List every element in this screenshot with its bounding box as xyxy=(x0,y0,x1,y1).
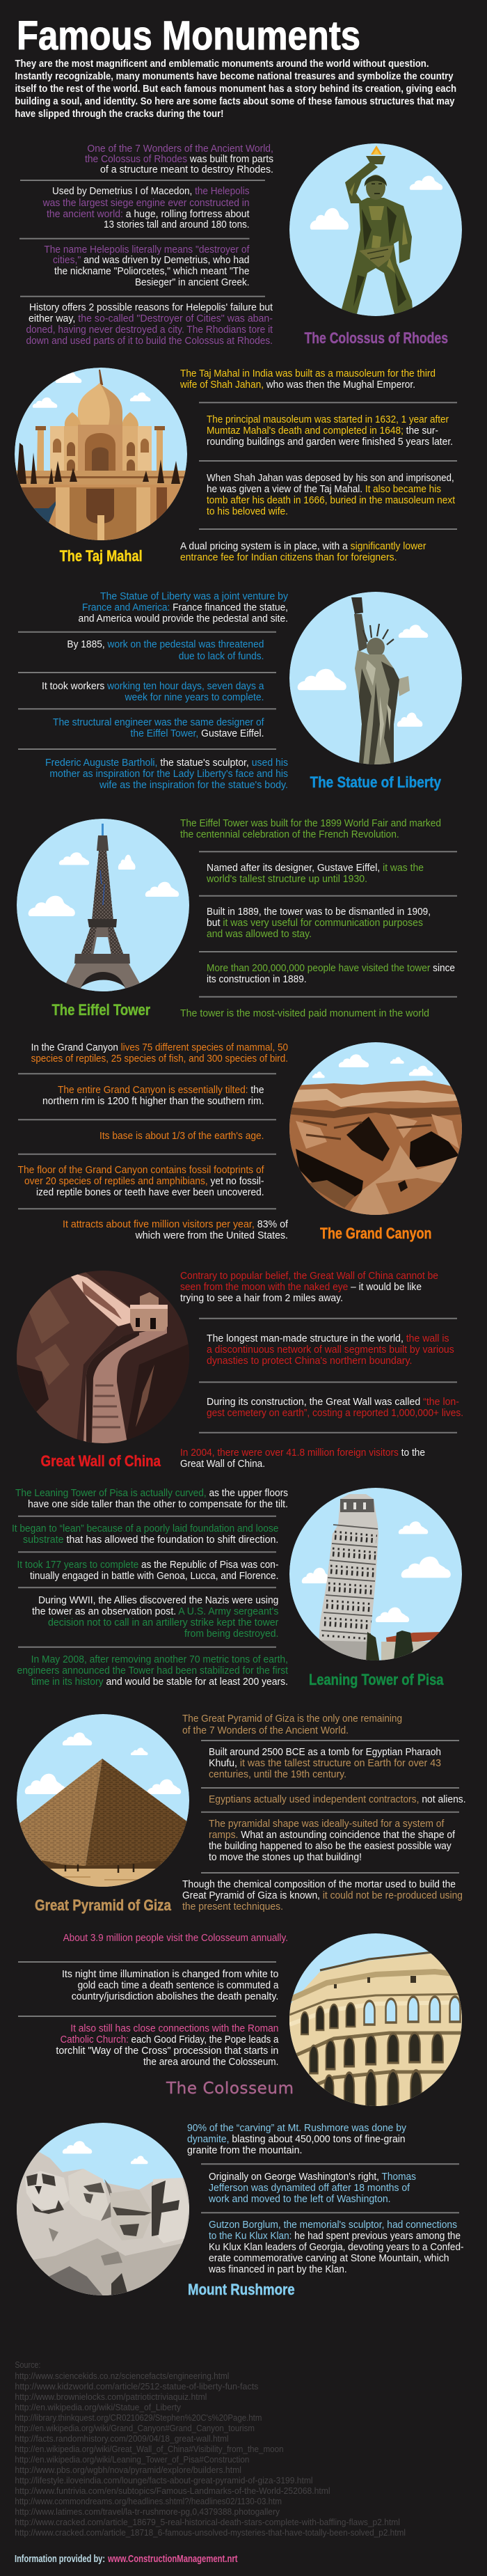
fact 5: Frederic Auguste Bartholi, the statue's sculptor, used his xyxy=(45,757,288,769)
fact 1: The Statue of Liberty was a joint venture by xyxy=(100,590,288,602)
fact 2 xyxy=(209,1746,441,1780)
illustration: Great Wall of China xyxy=(17,1271,189,1443)
heading: Great Wall of China: Great Wall of China xyxy=(40,1452,161,1470)
fact 1: of the 7 Wonders of the Ancient World. xyxy=(182,1725,349,1736)
fact 1: About 3.9 million people visit the Colosseum annually. xyxy=(63,1932,288,1944)
fact 2: By 1885, work on the pedestal was threatened xyxy=(67,638,264,650)
fact 4: its construction in 1889. xyxy=(207,973,307,985)
fact 3: was financed in part by the Klan. xyxy=(208,2263,347,2275)
heading: The Colosseum: The Colosseum xyxy=(166,2080,294,2098)
fact 2: the ancient world: a huge, rolling fortress about xyxy=(47,208,250,220)
fact 5: Though the chemical composition of the mortar used to build the xyxy=(182,1878,456,1890)
source list: http://www.latimes.com/travel/la-tr-rushmore-pg,0,4379388.photogallery xyxy=(15,2506,280,2517)
source list: http://www.sciencekids.co.nz/sciencefacts/engineering.html xyxy=(15,2371,229,2381)
fact 1: have one side taller than the other to compensate for the tilt. xyxy=(28,1498,288,1510)
fact 4 xyxy=(180,1447,425,1470)
heading: The Colossus of Rhodes: The Colossus of Rhodes xyxy=(305,329,448,347)
fact 4: from being destroyed. xyxy=(184,1628,278,1640)
fact 1: The Leaning Tower of Pisa is actually curved, as the upper floors xyxy=(15,1487,288,1499)
source list: http://www.cracked.com/article_18718_6-famous-unsolved-mysteries-that-have-totally-been-solved_p2.html xyxy=(15,2527,406,2538)
fact 4 xyxy=(207,962,455,985)
fact 5 xyxy=(45,757,288,791)
fact 5 xyxy=(182,1878,463,1913)
source list: http://www.funtrivia.com/en/subtopics/Famous-Landmarks-of-the-World-252068.html xyxy=(15,2485,330,2496)
fact 1 xyxy=(78,590,288,625)
fact 3 xyxy=(42,680,264,703)
fact 4: More than 200,000,000 people have visited the tower since xyxy=(207,962,455,974)
fact 2: world's tallest structure up until 1930. xyxy=(206,873,367,885)
fact 1: In the Grand Canyon lives 75 different species of mammal, 50 xyxy=(31,1042,288,1053)
panel: The Grand Canyon xyxy=(18,1042,466,1242)
intro paragraph: have slipped through the cracks during the tour! xyxy=(15,108,224,120)
fact 5: The tower is the most-visited paid monument in the world xyxy=(180,1007,429,1019)
fact 4: the building happened to also be the easiest possible way xyxy=(209,1840,452,1852)
fact 2: rounding buildings and garden were finished 5 years later. xyxy=(207,436,453,448)
fact 4: over 20 species of reptiles and amphibians, yet no fossil- xyxy=(24,1175,264,1187)
source list xyxy=(15,2359,406,2538)
fact 3: When Shah Jahan was deposed by his son and imprisoned, xyxy=(207,472,454,484)
heading: The Taj Mahal: The Taj Mahal xyxy=(60,547,143,565)
fact 4: to move the stones up that building! xyxy=(209,1851,362,1863)
fact 5: wife as the inspiration for the statue's body. xyxy=(99,779,288,791)
fact 3: he was given a view of the Taj Mahal. It also became his xyxy=(207,483,441,495)
fact 3: It also still has close connections with the Roman xyxy=(70,2023,278,2034)
fact 3 xyxy=(207,1396,463,1419)
fact 1: species of reptiles, 25 species of fish, and 300 species of bird. xyxy=(31,1053,288,1065)
source list: http://en.wikipedia.org/wiki/Grand_Canyon#Grand_Canyon_tourism xyxy=(15,2423,255,2433)
heading: The Eiffel Tower: The Eiffel Tower xyxy=(51,1001,150,1019)
fact 5: engineers announced the Tower had been stabilized for the first xyxy=(17,1665,289,1676)
illustration: Taj Mahal with reflecting pool xyxy=(14,368,188,540)
fact 1: and America would provide the pedestal and site. xyxy=(78,613,288,625)
illustration: The Colosseum xyxy=(289,1933,473,2110)
fact 3: Its base is about 1/3 of the earth's age. xyxy=(99,1130,264,1142)
fact 3 xyxy=(207,472,456,517)
fact 2 xyxy=(42,185,250,230)
fact 3: Catholic Church: each Good Friday, the Pope leads a xyxy=(61,2034,279,2045)
fact 2: work and moved to the left of Washington. xyxy=(208,2193,391,2205)
fact 4 xyxy=(180,540,426,563)
source list: http://www.kidzworld.com/article/2512-statue-of-liberty-fun-facts xyxy=(15,2381,259,2392)
fact 1: The Eiffel Tower was built for the 1899 World Fair and marked xyxy=(180,817,441,829)
fact 3: the area around the Colosseum. xyxy=(143,2056,278,2068)
heading: Mount Rushmore: Mount Rushmore xyxy=(188,2281,295,2298)
fact 1: One of the 7 Wonders of the Ancient World, xyxy=(87,143,273,155)
fact 1: The Taj Mahal in India was built as a mausoleum for the third xyxy=(180,368,436,379)
source list: http://library.thinkquest.org/CR0210629/Stephen%20C's%20Page.htm xyxy=(15,2412,262,2423)
fact 1: dynamite, blasting about 450,000 tons of fine-grain xyxy=(187,2133,406,2145)
fact 3: It took workers working ten hour days, seven days a xyxy=(42,680,264,692)
fact 3 xyxy=(208,2219,463,2275)
fact 2 xyxy=(67,638,264,662)
fact 2: a discontinuous network of wall segments built by various xyxy=(207,1344,454,1356)
fact 3: During its construction, the Great Wall was called “the lon- xyxy=(207,1396,459,1408)
fact 2: Used by Demetrius I of Macedon, the Helepolis xyxy=(52,185,250,197)
fact 5: which were from the United States. xyxy=(135,1230,288,1241)
panel: The Colosseum xyxy=(18,1932,473,2110)
fact 4: ized reptile bones or teeth have ever been uncovered. xyxy=(36,1186,264,1198)
fact 2 xyxy=(12,1523,278,1546)
panel: Leaning Tower of Pisa xyxy=(12,1487,462,1688)
fact 2 xyxy=(62,1968,279,2002)
fact 3 xyxy=(56,2023,279,2068)
fact 2 xyxy=(207,1333,454,1367)
fact 1: the centennial celebration of the French Revolution. xyxy=(180,828,399,840)
fact 2: The longest man-made structure in the world, the wall is xyxy=(207,1333,449,1344)
panel: The Eiffel Tower xyxy=(17,817,457,1019)
source list: Source: xyxy=(15,2359,40,2370)
fact 4: entrance fee for Indian citizens than for foreigners. xyxy=(180,551,397,563)
fact 2 xyxy=(207,414,453,448)
fact 3: Besieger" in ancient Greek. xyxy=(135,276,249,288)
panel: The Taj Mahal xyxy=(14,368,457,565)
fact 2: due to lack of funds. xyxy=(179,650,264,662)
illustration: Leaning Tower of Pisa xyxy=(289,1488,462,1664)
fact 1: trying to see a hair from 2 miles away. xyxy=(180,1292,343,1304)
source list: http://en.wikipedia.org/wiki/Leaning_Tower_of_Pisa#Construction xyxy=(15,2454,249,2465)
heading: Great Pyramid of Giza: Great Pyramid of Giza xyxy=(35,1896,172,1914)
fact 3: torchlit "Way of the Cross" procession that starts in xyxy=(56,2045,278,2057)
source list: http://www.cracked.com/article_18679_5-real-historical-death-stars-complete-with-baffling-flaws_p2.html xyxy=(15,2517,400,2527)
fact 1: granite from the mountain. xyxy=(187,2144,302,2156)
illustration: Mount Rushmore xyxy=(17,2123,189,2298)
source list: http://en.wikipedia.org/wiki/Statue_of_Liberty xyxy=(15,2402,181,2412)
fact 2: Named after its designer, Gustave Eiffel, it was the xyxy=(207,862,424,874)
fact 3: to the Ku Klux Klan: he had spent previous years among the xyxy=(209,2230,461,2242)
fact 3: Built in 1889, the tower was to be dismantled in 1909, xyxy=(207,906,431,918)
fact 3: Gutzon Borglum, the memorial's sculptor, had connections xyxy=(209,2219,457,2231)
illustration: Eiffel Tower xyxy=(17,819,189,991)
fact 4: The floor of the Grand Canyon contains fossil footprints of xyxy=(18,1164,264,1176)
fact 2: The principal mausoleum was started in 1632, 1 year after xyxy=(207,414,449,425)
fact 4: The pyramidal shape was ideally-suited for a system of xyxy=(209,1818,445,1830)
footer credit: www.ConstructionManagement.nrt xyxy=(107,2553,238,2565)
fact 5: mother as inspiration for the Lady Liberty's face and his xyxy=(49,768,288,780)
fact 2: Its night time illumination is changed from white to xyxy=(62,1968,278,1980)
fact 4 xyxy=(209,1818,456,1863)
fact 2 xyxy=(206,862,424,885)
fact 3: tinually engaged in battle with Genoa, Lucca, and Florence. xyxy=(30,1570,278,1582)
fact 1 xyxy=(85,143,273,175)
fact 5: time in its history and would be stable for at least 200 years. xyxy=(31,1676,288,1688)
fact 4: doned, having never destroyed a city. The Rhodians tore it xyxy=(26,324,273,336)
source list: http://www.brownielocks.com/patriotictriviaquiz.html xyxy=(15,2392,207,2402)
fact 4: decision not to call in an artillery strike kept the tower xyxy=(48,1617,278,1628)
fact 4: either way, the so-called "Destroyer of Cities" was aban- xyxy=(29,313,273,324)
illustration: Grand Canyon xyxy=(285,1042,466,1218)
fact 5 xyxy=(63,1218,289,1241)
fact 4: the tower as an observation post. A U.S. Army sergeant's xyxy=(32,1605,278,1617)
fact 3: erate commemorative carving at Stone Mountain, which xyxy=(209,2252,449,2264)
illustration: Colossus statue in sky circle xyxy=(289,143,462,317)
fact 3 xyxy=(207,906,431,940)
fact 5: In May 2008, after removing another 70 metric tons of earth, xyxy=(31,1654,288,1665)
fact 4: History offers 2 possible reasons for Helepolis' failure but xyxy=(29,301,273,313)
fact 4: Great Wall of China. xyxy=(180,1458,265,1470)
fact 3: but it was very useful for communication purposes xyxy=(207,917,423,929)
fact 4: A dual pricing system is in place, with a significantly lower xyxy=(180,540,426,552)
fact 1: Contrary to popular belief, the Great Wall of China cannot be xyxy=(180,1270,438,1282)
fact 3: The name Helepolis literally means "destroyer of xyxy=(44,244,250,256)
fact 2: The entire Grand Canyon is essentially tilted: the xyxy=(58,1084,264,1096)
fact 1: 90% of the “carving” at Mt. Rushmore was done by xyxy=(187,2122,406,2134)
fact 3: It took 177 years to complete as the Republic of Pisa was con- xyxy=(17,1559,278,1571)
fact 2: Mumtaz Mahal's death and completed in 1648; the sur- xyxy=(207,425,438,437)
fact 1 xyxy=(180,817,441,840)
fact 1: the Colossus of Rhodes was built from parts xyxy=(85,153,273,165)
panel: Great Pyramid of Giza xyxy=(17,1713,466,1914)
fact 4 xyxy=(32,1594,278,1640)
panel: Great Wall of China xyxy=(17,1270,463,1470)
heading: The Statue of Liberty: The Statue of Liberty xyxy=(310,773,442,791)
fact 2: centuries, until the 19th century. xyxy=(209,1768,346,1780)
fact 1 xyxy=(182,1713,402,1736)
fact 3: gest cemetery on earth”, costing a reported 1,000,000+ lives. xyxy=(207,1407,463,1419)
fact 2: substrate that has allowed the foundation to shift direction. xyxy=(23,1534,278,1546)
illustration: Great Pyramid of Giza xyxy=(17,1714,191,1888)
fact 1 xyxy=(187,2122,406,2156)
fact 1 xyxy=(180,1270,438,1304)
footer credit: Information provided by: xyxy=(15,2553,105,2565)
panel: The Colossus of Rhodes xyxy=(19,143,462,347)
source list: http://www.pbs.org/wgbh/nova/pyramid/explore/builders.html xyxy=(15,2465,241,2475)
fact 2: was the largest siege engine ever constructed in xyxy=(42,197,250,209)
fact 3: Ku Klux Klan leaders of Georgia, devoting years to a Confed- xyxy=(209,2241,463,2253)
fact 1 xyxy=(179,368,436,391)
source list: http://lifestyle.iloveindia.com/lounge/facts-about-great-pyramid-of-giza-3199.html xyxy=(15,2475,313,2485)
heading: The Grand Canyon: The Grand Canyon xyxy=(320,1225,431,1242)
fact 2: Originally on George Washington's right, Thomas xyxy=(209,2171,416,2183)
fact 3: to his beloved wife. xyxy=(207,505,288,517)
source list: http://facts.randomhistory.com/2009/04/18_great-wall.html xyxy=(15,2433,229,2444)
fact 1 xyxy=(31,1042,288,1065)
fact 3: week for nine years to complete. xyxy=(125,691,264,703)
fact 5: Great Pyramid of Giza is known, it could not be re-produced using xyxy=(182,1890,463,1901)
fact 4: ramps. What an astounding coincidence that the shape of xyxy=(209,1829,456,1841)
footer credit xyxy=(15,2553,238,2565)
fact 2 xyxy=(42,1084,264,1107)
fact 1: France and America: France financed the statue, xyxy=(82,602,288,613)
fact 2: country/jurisdiction abolishes the death penalty. xyxy=(72,1990,278,2002)
fact 4: the Eiffel Tower, Gustave Eiffel. xyxy=(131,728,264,739)
fact 4 xyxy=(26,301,273,347)
title: Famous Monuments xyxy=(17,13,360,58)
fact 2: gold each time a death sentence is commuted a xyxy=(78,1979,279,1991)
fact 1: seen from the moon with the naked eye – it would be like xyxy=(180,1281,422,1293)
fact 2: It began to “lean” because of a poorly laid foundation and loose xyxy=(12,1523,278,1534)
intro paragraph: They are the most magnificent and emblematic monuments around the world without question. xyxy=(15,58,429,70)
panel: The Statue of Liberty xyxy=(18,590,462,791)
fact 3: and was allowed to stay. xyxy=(207,928,312,940)
fact 2: 13 stories tall and around 180 tons. xyxy=(104,219,249,230)
fact 1: wife of Shah Jahan, who was then the Mughal Emperor. xyxy=(179,379,415,391)
fact 2: Built around 2500 BCE as a tomb for Egyptian Pharaoh xyxy=(209,1746,441,1758)
fact 4: In 2004, there were over 41.8 million foreign visitors to the xyxy=(180,1447,425,1459)
fact 5: the present techniques. xyxy=(182,1901,283,1913)
fact 2 xyxy=(208,2171,416,2205)
fact 5: It attracts about five million visitors per year, 83% of xyxy=(63,1218,289,1230)
fact 4 xyxy=(18,1164,264,1198)
fact 3: Egyptians actually used independent contractors, not aliens. xyxy=(209,1793,466,1805)
fact 4: The structural engineer was the same designer of xyxy=(53,716,264,728)
fact 4 xyxy=(53,716,264,739)
fact 2: Khufu, it was the tallest structure on Earth for over 43 xyxy=(209,1757,441,1769)
fact 3: the nickname "Poliorcetes," which meant "The xyxy=(54,265,249,277)
fact 3 xyxy=(17,1559,278,1582)
source list: http://www.commondreams.org/headlines.shtml?/headlines02/1130-03.htm xyxy=(15,2496,282,2506)
fact 3: tomb after his death in 1666, buried in the mausoleum next xyxy=(207,494,456,506)
illustration: Statue of Liberty xyxy=(289,592,462,764)
fact 1 xyxy=(15,1487,288,1510)
fact 3: cities," and was driven by Demetrius, who had xyxy=(53,254,249,266)
panel: Mount Rushmore xyxy=(17,2122,463,2298)
heading: Leaning Tower of Pisa: Leaning Tower of Pisa xyxy=(309,1671,444,1688)
fact 4: During WWII, the Allies discovered the Nazis were using xyxy=(38,1594,278,1606)
fact 2: Jefferson was dynamited off after 18 months of xyxy=(209,2182,410,2194)
fact 2: northern rim is 1200 ft higher than the southern rim. xyxy=(42,1095,264,1107)
intro paragraph xyxy=(15,58,456,120)
fact 2: dynasties to protect China's northern boundary. xyxy=(207,1355,412,1367)
fact 1: of a structure meant to destroy Rhodes. xyxy=(100,164,273,175)
fact 5 xyxy=(17,1654,289,1688)
fact 3 xyxy=(44,244,250,288)
fact 1: The Great Pyramid of Giza is the only one remaining xyxy=(182,1713,402,1725)
fact 4: down and used parts of it to build the Colossus at Rhodes. xyxy=(26,335,273,347)
source list: http://en.wikipedia.org/wiki/Great_Wall_of_China#Visibility_from_the_moon xyxy=(15,2444,284,2454)
